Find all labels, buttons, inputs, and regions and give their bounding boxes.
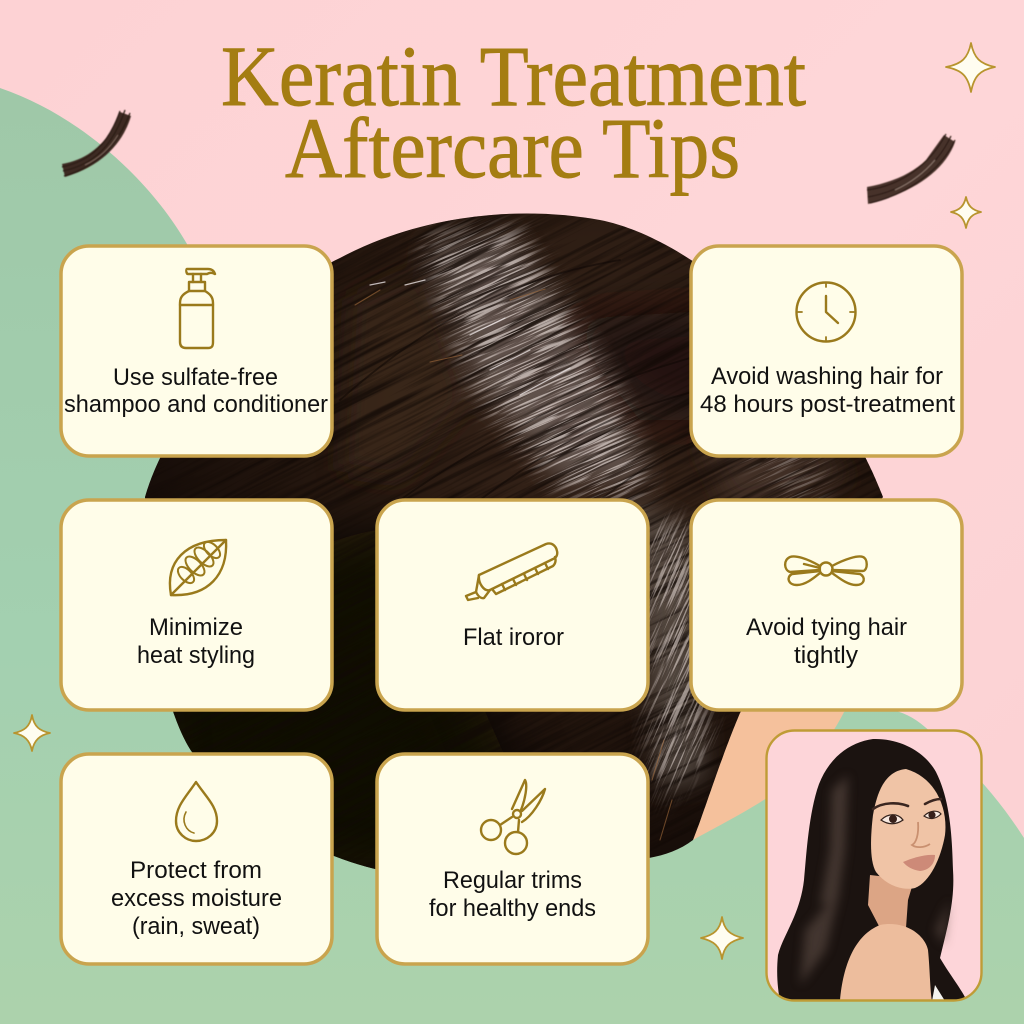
shoulder	[840, 924, 932, 1001]
panel: avoid tying hair	[691, 500, 962, 710]
portrait photo panel	[766, 730, 982, 1002]
text: regular trims	[429, 867, 596, 922]
text: avoid washing hair	[700, 363, 955, 418]
text: regular trims: for healthy ends	[429, 895, 596, 922]
text: protect from moisture: (rain, sweat)	[132, 913, 260, 940]
sparkle bottom	[701, 917, 743, 959]
icon: pump bottle	[180, 269, 215, 348]
text: minimize heat styling	[137, 614, 255, 669]
hero image: glossy hair	[145, 214, 883, 870]
title: Keratin Treatment	[221, 28, 806, 124]
text: minimize heat styling: Minimize	[149, 614, 243, 641]
text: avoid tying hair: tightly	[794, 642, 859, 669]
title: Aftercare Tips	[285, 100, 740, 196]
background: peach skin area	[649, 700, 846, 858]
panel: sulfate-free shampoo	[61, 246, 332, 456]
brows	[873, 799, 941, 809]
icon: scissors	[481, 780, 545, 854]
sparkle mid right	[951, 197, 981, 228]
icon: clock	[796, 282, 856, 342]
icon: water drop	[176, 782, 217, 841]
text: avoid tying hair	[746, 614, 907, 669]
nose	[912, 822, 930, 847]
hair sheen	[800, 775, 950, 985]
hair back	[777, 739, 967, 1001]
icon: bow	[785, 556, 867, 585]
panel: protect from moisture	[61, 754, 332, 964]
panel: avoid washing	[691, 246, 962, 456]
eyes	[881, 811, 941, 824]
text: protect from moisture: excess moisture	[111, 885, 282, 912]
panel: regular trims	[377, 754, 648, 964]
neck	[868, 875, 914, 928]
text: use sulfate-free: Use sulfate-free	[113, 364, 278, 391]
decorative hair strand left	[62, 110, 131, 177]
panel: minimize heat styling	[61, 500, 332, 710]
decorative hair strand right	[867, 134, 955, 204]
icon: flat iron	[466, 543, 557, 600]
text: minimize heat styling: heat styling	[137, 642, 255, 669]
text: avoid washing hair: 48 hours post-treatment	[700, 391, 955, 418]
icon: leaf with coil	[170, 539, 226, 595]
text: avoid tying hair: Avoid tying hair	[746, 614, 907, 641]
text: protect from moisture: Protect from	[130, 857, 262, 884]
text: protect from moisture	[111, 857, 282, 940]
face	[871, 769, 945, 889]
title	[221, 28, 806, 196]
text: use sulfate-free	[64, 364, 328, 418]
sparkle top right	[946, 43, 995, 92]
text: flat iroror: Flat iroror	[463, 624, 564, 651]
lips	[903, 855, 935, 871]
panel: flat iron	[377, 500, 648, 710]
text: avoid washing hair: Avoid washing hair for	[711, 363, 943, 390]
text: use sulfate-free: shampoo and conditioner	[64, 391, 328, 418]
text: regular trims: Regular trims	[443, 867, 582, 894]
sparkle left	[14, 715, 50, 751]
